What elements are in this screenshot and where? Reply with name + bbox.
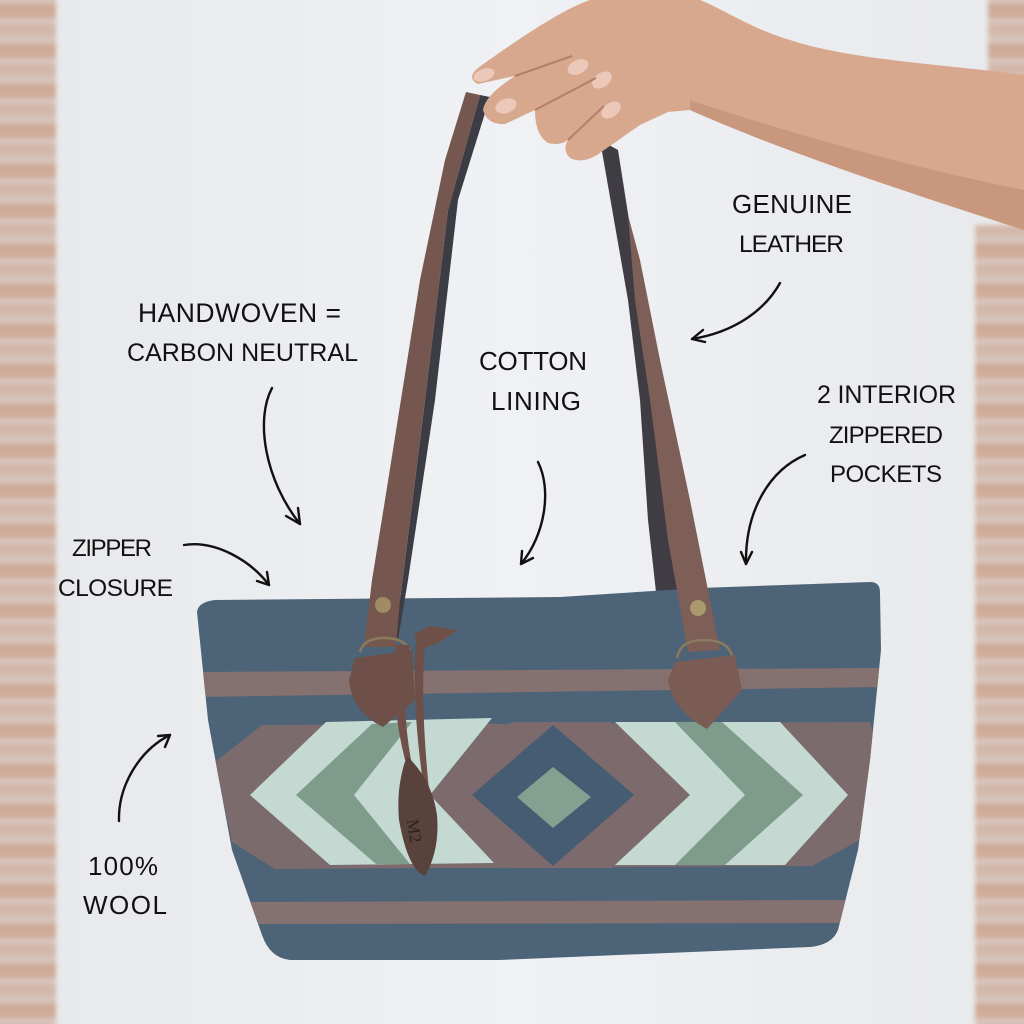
- diamond band background: [215, 722, 880, 869]
- label: interior pockets: [817, 381, 956, 488]
- label: handwoven carbon neutral: CARBON NEUTRAL: [127, 339, 358, 367]
- arrow: genuine leather: [692, 283, 780, 342]
- label: handwoven carbon neutral: HANDWOVEN =: [138, 298, 341, 328]
- bag body: [190, 575, 890, 970]
- label: wool: WOOL: [83, 890, 167, 920]
- arrow: pockets: [741, 455, 805, 564]
- label: genuine leather: [732, 189, 852, 258]
- label: interior pockets: ZIPPERED: [829, 422, 943, 449]
- green right chevron: [675, 722, 803, 865]
- mint left chevron: [250, 718, 494, 865]
- finger nails: [472, 56, 624, 122]
- blue diamond: [472, 725, 634, 866]
- rivet: [375, 597, 391, 613]
- green centre diamond: [517, 767, 591, 828]
- left leather tab: [349, 650, 415, 727]
- label: cotton lining: [479, 346, 587, 416]
- label: wool: [83, 851, 167, 920]
- lower mauve stripe: [240, 900, 850, 924]
- left strap: [349, 92, 490, 727]
- arrow: zipper: [184, 544, 269, 585]
- strap ring: [677, 640, 732, 658]
- label: zipper closure: [58, 535, 173, 602]
- right leather tab: [668, 655, 742, 729]
- mint right chevron: [615, 722, 848, 865]
- label: interior pockets: POCKETS: [830, 461, 942, 488]
- arrow: cotton lining: [521, 462, 545, 564]
- label: interior pockets: 2 INTERIOR: [817, 381, 956, 409]
- label: handwoven carbon neutral: [127, 298, 358, 367]
- label: cotton lining: COTTON: [479, 346, 587, 376]
- arm and hand: [472, 0, 1024, 230]
- mauve centre diamond: [510, 722, 613, 868]
- leather zipper pull with M2 tag: [394, 626, 458, 876]
- leather zipper pull with M2 tag: M2: [403, 818, 425, 844]
- label: cotton lining: LINING: [491, 386, 581, 416]
- label: zipper closure: CLOSURE: [58, 575, 173, 602]
- arrow: wool: [119, 735, 170, 821]
- label: genuine leather: LEATHER: [739, 231, 844, 258]
- strap ring: [360, 638, 410, 652]
- label: zipper closure: ZIPPER: [72, 535, 152, 562]
- back strap of bag: [600, 140, 678, 592]
- rivet: [690, 600, 706, 616]
- label: genuine leather: GENUINE: [732, 189, 852, 219]
- arrow: handwoven: [264, 388, 300, 524]
- green left chevron: [296, 722, 412, 864]
- upper mauve stripe: [195, 668, 880, 697]
- label: wool: 100%: [88, 851, 158, 881]
- right strap: [628, 215, 742, 729]
